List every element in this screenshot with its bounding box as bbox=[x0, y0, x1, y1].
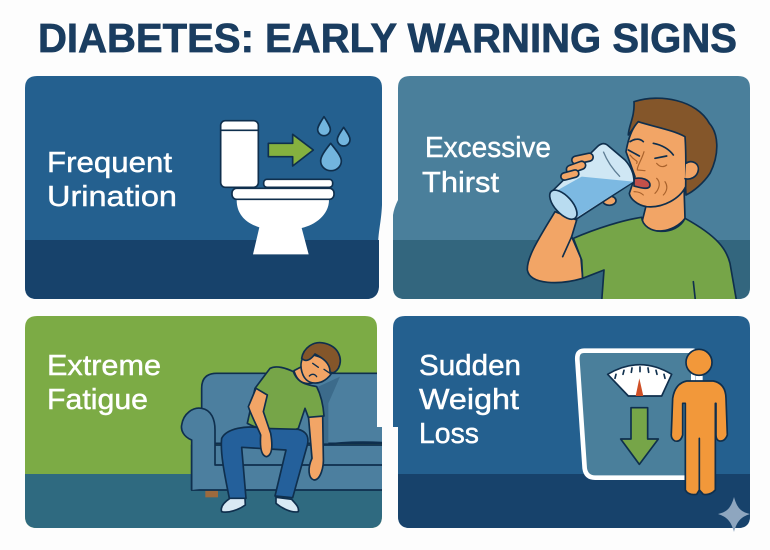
eyes and brows bbox=[628, 139, 673, 158]
heading: sudden weight loss: Sudden bbox=[419, 350, 521, 382]
card background bbox=[393, 316, 750, 528]
arm crease bbox=[563, 237, 572, 257]
arrow bbox=[268, 134, 313, 166]
heading line 3: Loss bbox=[419, 418, 479, 450]
toilet rim bbox=[232, 188, 334, 199]
sofa base bbox=[192, 445, 383, 490]
shirt bbox=[573, 217, 737, 302]
arm bbox=[527, 212, 583, 283]
panel: excessive thirst bbox=[393, 76, 750, 302]
body bbox=[671, 381, 727, 495]
heading line 2: Fatigue bbox=[47, 384, 148, 416]
water bbox=[555, 177, 633, 218]
heading line 2: Thirst bbox=[422, 167, 499, 199]
jeans bbox=[221, 427, 308, 498]
neck bbox=[696, 376, 703, 382]
panel: frequent urination bbox=[25, 76, 382, 299]
sofa back bbox=[202, 373, 383, 443]
glass body bbox=[552, 144, 634, 219]
fingers bbox=[560, 152, 594, 181]
tank lid line bbox=[221, 128, 258, 133]
card background bbox=[25, 316, 382, 528]
glass highlight bbox=[603, 152, 620, 177]
head bbox=[301, 355, 333, 383]
ear bbox=[685, 162, 698, 179]
heading: extreme fatigue: Extreme bbox=[47, 350, 161, 382]
icon: sparkle bbox=[718, 497, 750, 532]
left shoe bbox=[221, 498, 245, 512]
shirt bbox=[247, 367, 324, 432]
hair bbox=[628, 98, 717, 195]
leg divider bbox=[697, 438, 702, 490]
right arm bbox=[308, 415, 323, 480]
shadow behind man bbox=[318, 376, 340, 444]
dial ticks bbox=[615, 367, 665, 378]
illustration: man slumped on sofa bbox=[181, 343, 383, 512]
nose bbox=[637, 152, 645, 171]
person bbox=[671, 349, 727, 495]
back cushion line bbox=[322, 442, 383, 445]
sofa arm bbox=[181, 408, 383, 490]
toilet seat bbox=[264, 179, 333, 187]
floor band bbox=[25, 240, 379, 299]
panel: sudden weight loss bbox=[393, 316, 750, 532]
face wrinkles bbox=[630, 155, 667, 195]
glass of water bbox=[545, 144, 634, 224]
card background bbox=[393, 76, 750, 299]
neck bbox=[642, 187, 685, 231]
left arm bbox=[248, 388, 272, 457]
mouth bbox=[634, 178, 650, 188]
heading: excessive thirst: Excessive bbox=[425, 132, 551, 164]
dial needle bbox=[636, 378, 643, 396]
title: DIABETES: EARLY WARNING SIGNS bbox=[38, 15, 737, 61]
closed eyes and mouth bbox=[309, 363, 330, 377]
scale platform bbox=[577, 351, 693, 478]
glass base bbox=[548, 189, 578, 220]
scale dial bbox=[608, 365, 672, 396]
right shoe bbox=[276, 497, 298, 512]
toilet bowl bbox=[237, 200, 329, 254]
card background bbox=[25, 76, 382, 299]
head bbox=[686, 349, 712, 375]
heading line 2: Urination bbox=[47, 181, 177, 213]
floor band bbox=[398, 474, 750, 528]
down arrow bbox=[621, 408, 658, 464]
shirt crease bbox=[693, 282, 695, 300]
illustration: scale with person bbox=[577, 349, 727, 495]
thumb bbox=[603, 196, 616, 205]
neck bbox=[294, 367, 318, 383]
face bbox=[626, 122, 686, 207]
heading line 2: Weight bbox=[419, 384, 519, 416]
icon: toilet with arrow and drops bbox=[221, 117, 350, 254]
floor band bbox=[25, 474, 382, 528]
toilet tank bbox=[221, 121, 258, 187]
water drops bbox=[318, 117, 350, 171]
floor band bbox=[393, 240, 750, 299]
illustration: man drinking water bbox=[527, 98, 737, 302]
sofa foot bbox=[205, 491, 218, 497]
panel: extreme fatigue bbox=[25, 316, 383, 528]
hair bbox=[302, 343, 340, 373]
heading: frequent urination: Frequent bbox=[47, 147, 172, 179]
